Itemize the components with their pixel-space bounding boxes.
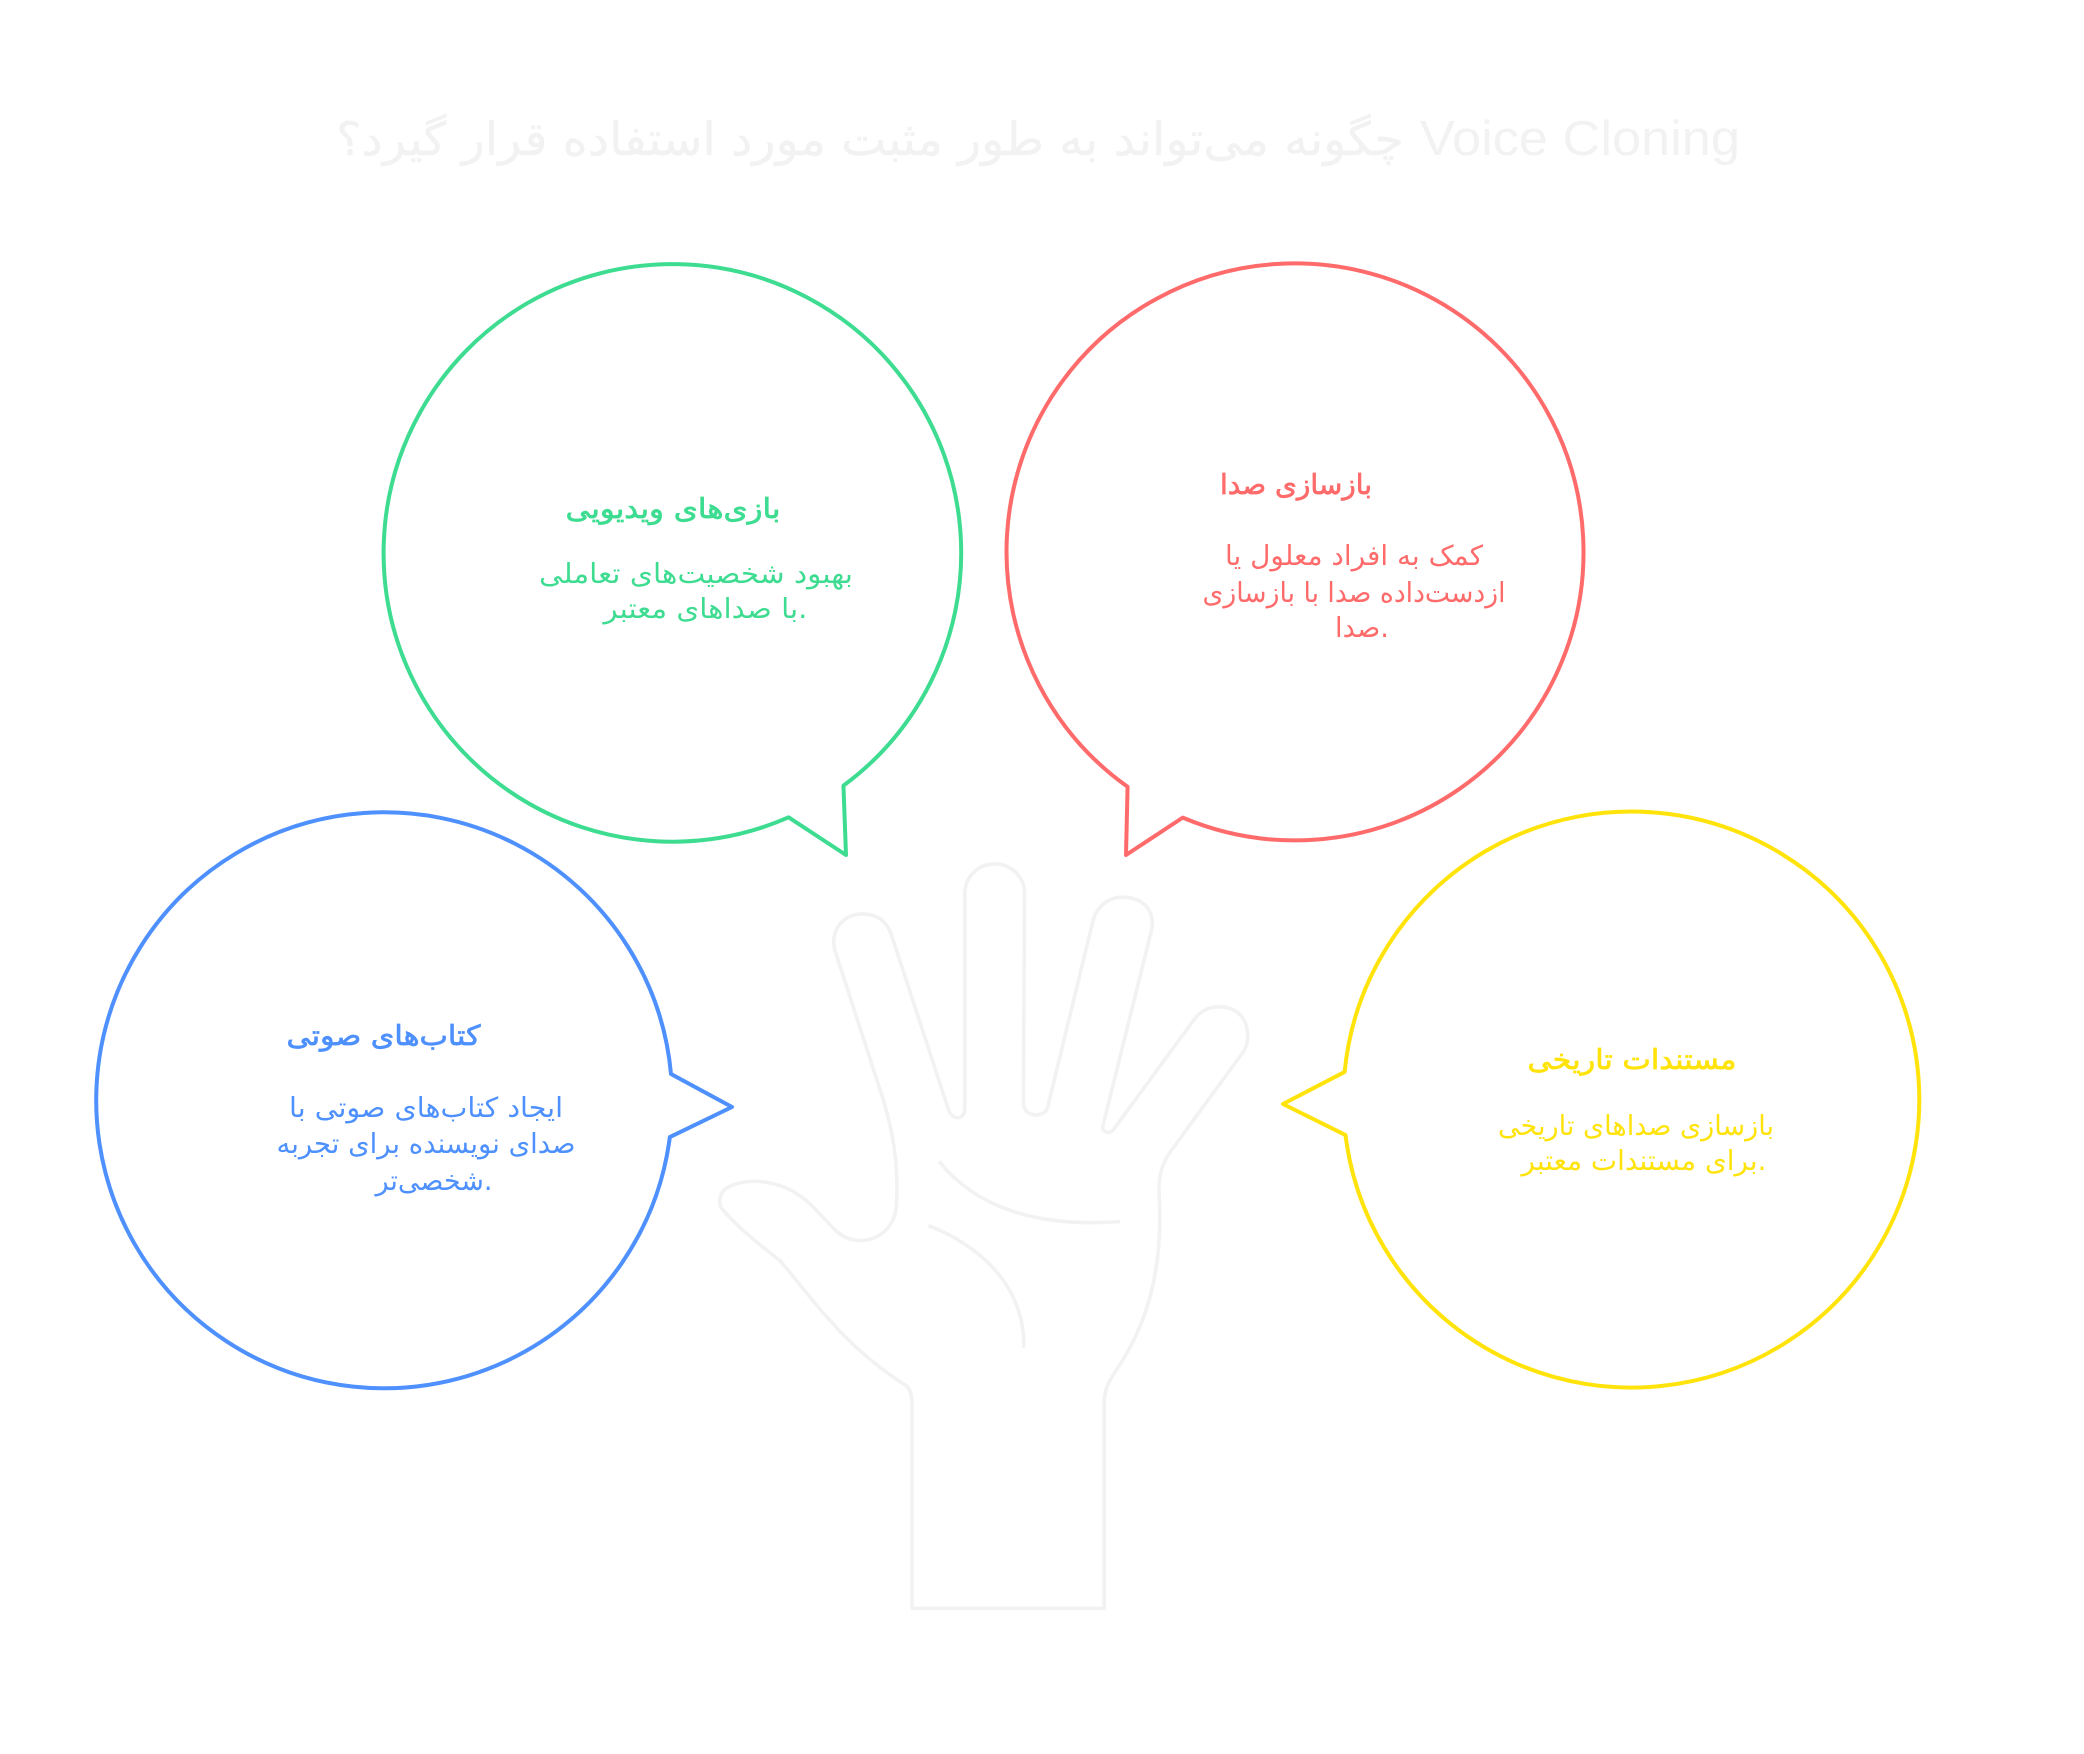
- text block: video games description: با صداهای معتبر.: [601, 593, 807, 625]
- panel: video games bubble: [384, 264, 961, 855]
- text block: historical documentaries description: برای مستندات معتبر.: [1519, 1145, 1766, 1177]
- text block: voice reconstruction description: صدا.: [1335, 612, 1389, 644]
- bubble outline: red: [1007, 263, 1584, 855]
- text block: video games description: [539, 558, 853, 625]
- text block: video games description: بهبود شخصیت‌های تعاملی: [539, 558, 853, 590]
- palm line: lower: [928, 1226, 1024, 1348]
- panel: audiobooks bubble: [96, 812, 732, 1388]
- heading: video games: بازی‌های ویدیویی: [566, 493, 780, 525]
- text block: historical documentaries description: بازسازی صداهای تاریخی: [1498, 1110, 1774, 1142]
- text block: voice reconstruction description: [1202, 540, 1506, 644]
- bubble outline: blue: [96, 812, 732, 1388]
- heading: voice reconstruction: بازسازی صدا: [1220, 469, 1372, 501]
- title: Voice Cloning: [1420, 112, 1740, 166]
- text block: historical documentaries description: [1498, 1110, 1774, 1177]
- icon: open hand: [720, 864, 1248, 1608]
- text block: voice reconstruction description: ازدست‌داده صدا با بازسازی: [1202, 577, 1506, 609]
- text block: voice reconstruction description: کمک به افراد معلول یا: [1225, 540, 1484, 572]
- text block: audiobooks description: صدای نویسنده برای تجربه: [276, 1128, 576, 1160]
- text block: audiobooks description: [276, 1092, 576, 1197]
- heading: audiobooks: کتاب‌های صوتی: [286, 1020, 481, 1052]
- palm line: upper: [939, 1161, 1120, 1223]
- heading: historical documentaries: مستندات تاریخی: [1528, 1044, 1736, 1076]
- text block: audiobooks description: شخصی‌تر.: [374, 1165, 492, 1197]
- text block: audiobooks description: ایجاد کتاب‌های صوتی با: [289, 1092, 563, 1124]
- panel: historical documentaries bubble: [1283, 812, 1919, 1388]
- bubble outline: yellow: [1283, 812, 1919, 1388]
- hand outline: [720, 864, 1248, 1608]
- bubble outline: green: [384, 264, 961, 855]
- panel: voice reconstruction bubble: [1007, 263, 1584, 855]
- title: چگونه می‌تواند به طور مثبت مورد استفاده قرار گیرد؟: [336, 112, 1404, 167]
